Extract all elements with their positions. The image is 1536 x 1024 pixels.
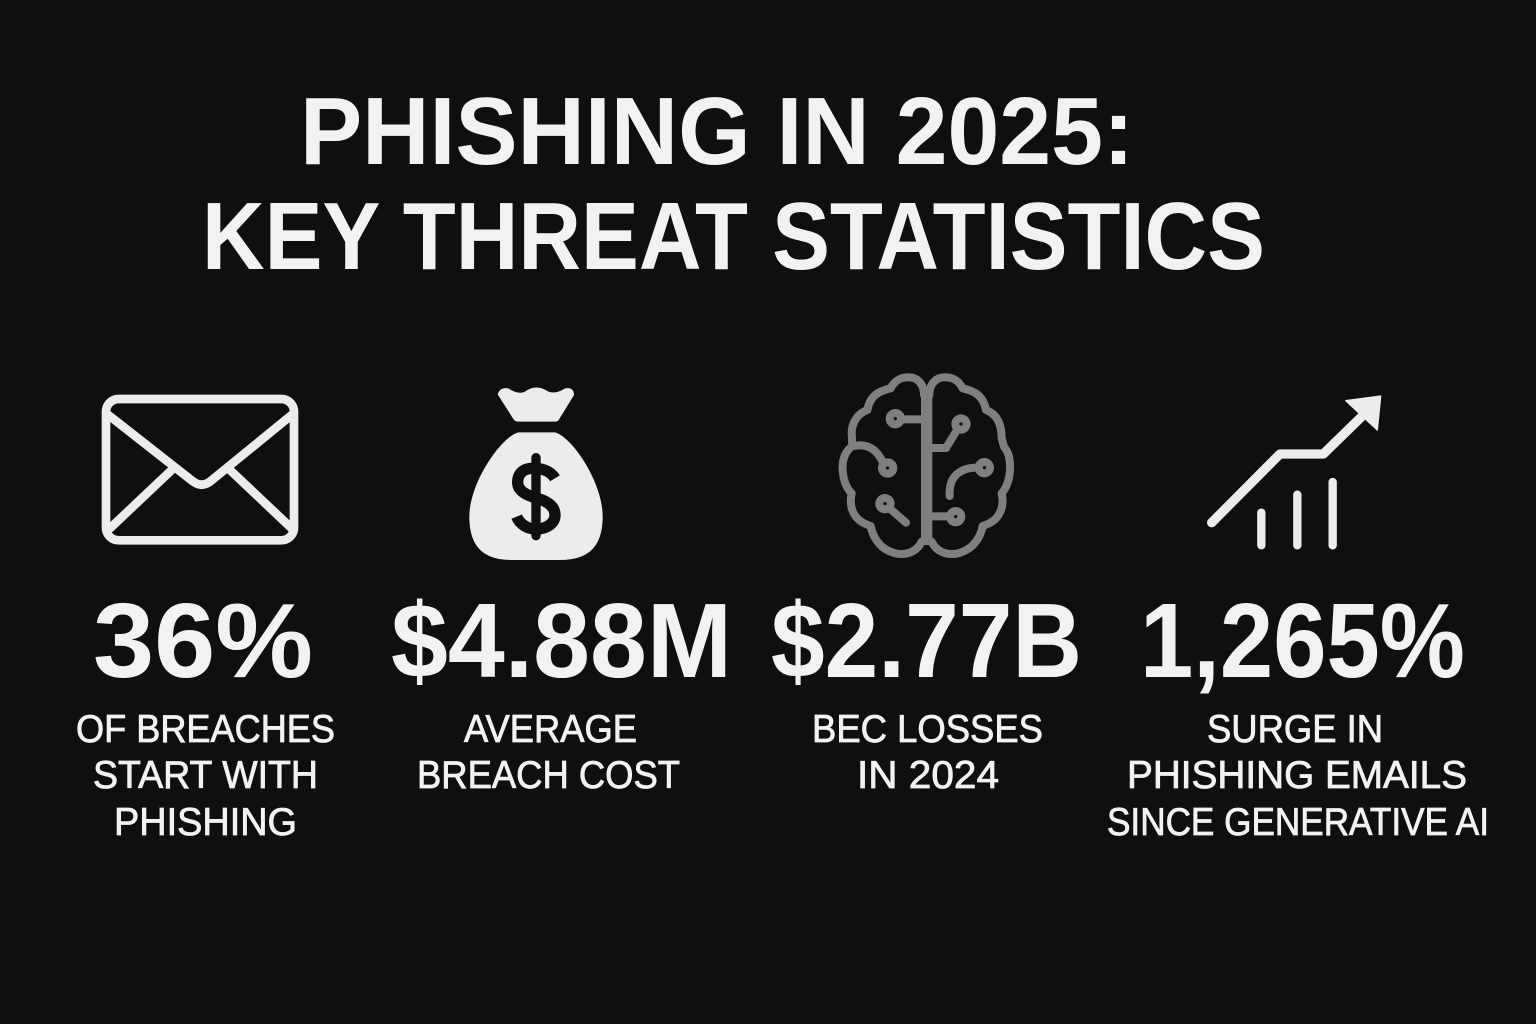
title <box>202 78 1265 290</box>
label: BEC losses in 2024: BEC LOSSES <box>812 708 1043 751</box>
icon: brain circuit <box>843 377 1010 554</box>
label: surge in phishing emails since generative AI: SURGE IN <box>1207 708 1383 751</box>
panel: BEC losses <box>771 377 1082 797</box>
title: KEY THREAT STATISTICS <box>202 183 1265 290</box>
label: of breaches start with phishing <box>76 708 335 844</box>
panel: phishing email surge <box>1107 396 1489 844</box>
panel: breaches start with phishing <box>76 399 335 844</box>
label: of breaches start with phishing: PHISHING <box>114 801 297 844</box>
label: average breach cost <box>417 708 680 797</box>
label: of breaches start with phishing: OF BREACHES <box>76 708 335 751</box>
label: BEC losses in 2024: IN 2024 <box>857 754 999 797</box>
stat: 36%: 36% <box>93 582 313 700</box>
title: PHISHING IN 2025: <box>300 78 1134 185</box>
label: average breach cost: BREACH COST <box>417 754 680 797</box>
icon: rising arrow chart <box>1212 396 1381 545</box>
icon: envelope <box>106 399 294 540</box>
stat: $4.88M: $4.88M <box>391 582 732 700</box>
label: average breach cost: AVERAGE <box>464 708 637 751</box>
panel: average breach cost <box>391 387 732 797</box>
label: of breaches start with phishing: START WITH <box>93 754 318 797</box>
stat: $2.77B: $2.77B <box>771 582 1082 700</box>
icon: money bag <box>469 387 603 560</box>
label: surge in phishing emails since generative AI: PHISHING EMAILS <box>1127 754 1467 797</box>
label: surge in phishing emails since generative AI: SINCE GENERATIVE AI <box>1107 801 1489 844</box>
label: surge in phishing emails since generative AI <box>1107 708 1489 844</box>
label: BEC losses in 2024 <box>812 708 1043 797</box>
stat: 1,265%: 1,265% <box>1140 582 1465 700</box>
